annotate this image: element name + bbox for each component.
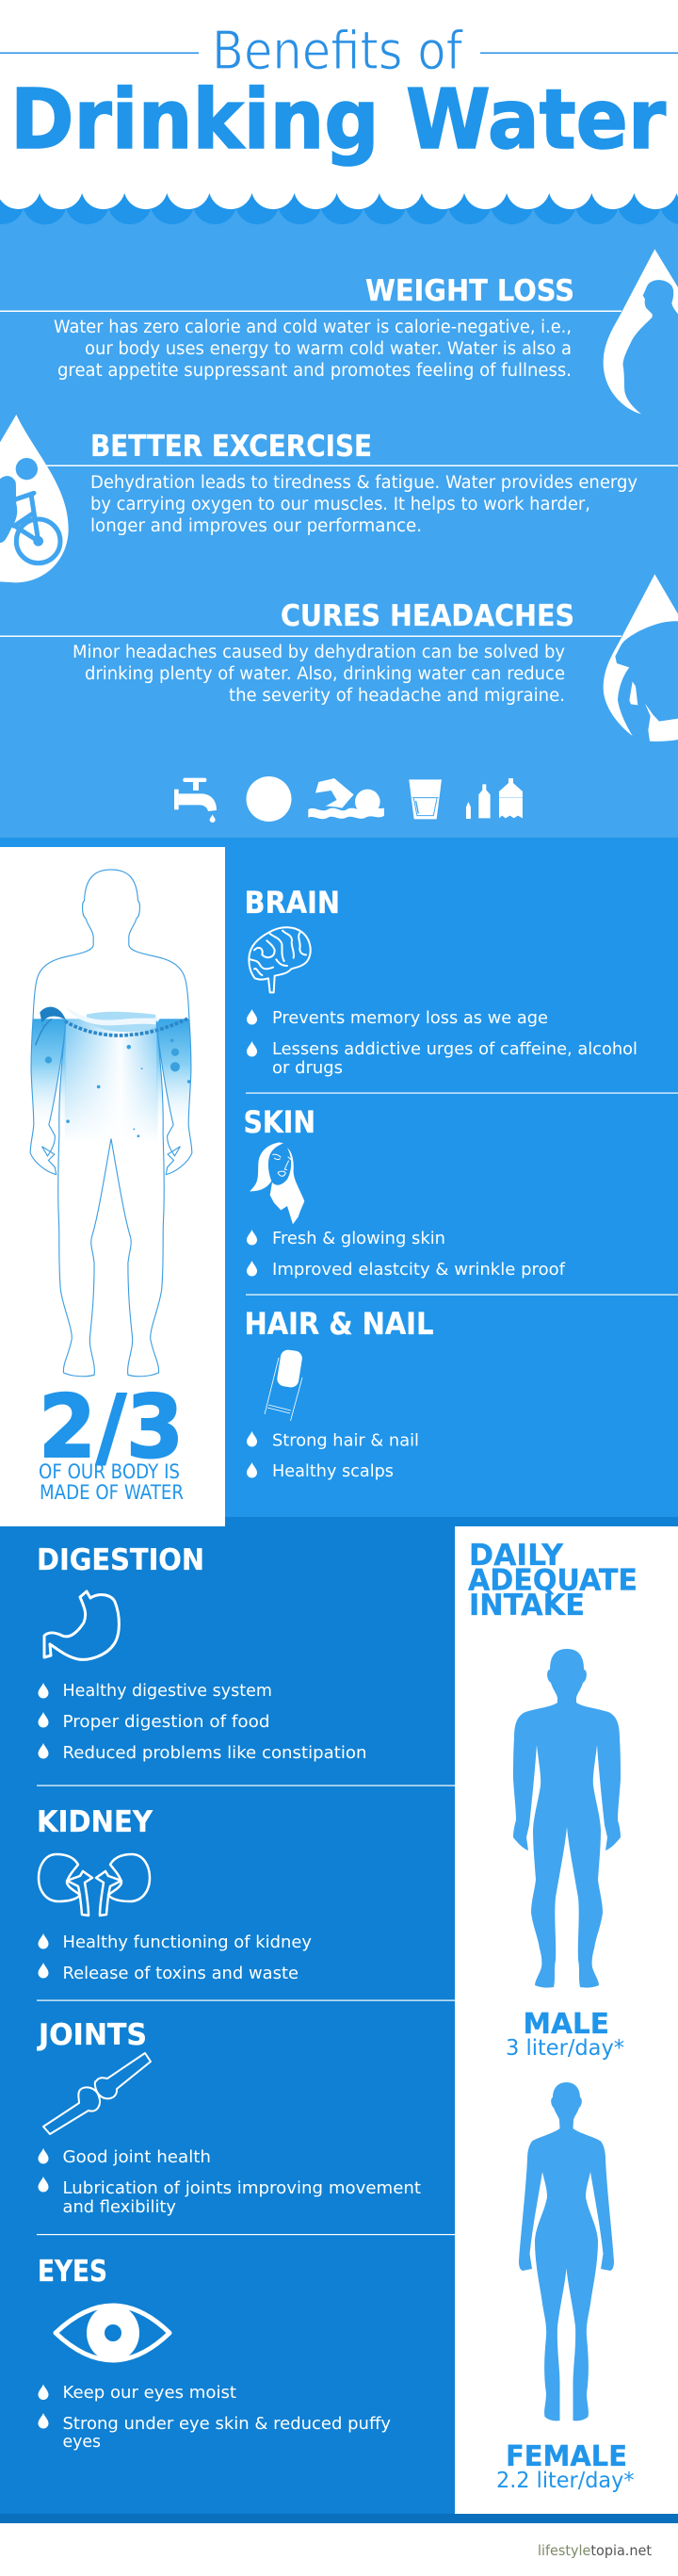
text: longer and improves our performance. [90,516,422,536]
bullets [247,1430,419,1481]
section: hair and nail [245,1306,433,1481]
panel: organs right (blue strip) [0,838,678,1517]
heading: WEIGHT LOSS [365,274,574,308]
bullets: Strong hair & nail [272,1430,419,1451]
heading [468,1539,638,1622]
wave band [0,179,678,224]
heading: ADEQUATE [468,1564,638,1598]
bullets [38,1932,312,1983]
text: Minor headaches caused by dehydration can be solved by [73,643,565,662]
section: digestion [37,1543,455,1786]
bullets: and flexibility [62,2197,176,2217]
panel: body water white [0,847,225,1526]
icon: brain [249,927,311,992]
title [0,21,678,168]
section: joints [37,2018,455,2235]
icon: tap [174,778,217,823]
icon: joint [43,2053,151,2134]
heading: JOINTS [37,2018,147,2052]
section: eyes [38,2255,391,2452]
cures headaches block [0,574,678,742]
female label: FEMALE [506,2440,627,2473]
bullets [247,1229,566,1280]
text: great appetite suppressant and promotes feeling of fullness. [57,361,572,381]
text: our body uses energy to warm cold water. Water is also a [85,339,572,359]
heading: INTAKE [469,1589,585,1622]
icon: glass [409,779,442,819]
text: Dehydration leads to tiredness & fatigue. Water provides energy [90,473,638,493]
bullets: Fresh & glowing skin [272,1229,445,1248]
male label: MALE [524,2008,609,2041]
heading: EYES [38,2255,107,2289]
heading: BETTER EXCERCISE [90,430,372,464]
section: skin [243,1104,678,1296]
heading: KIDNEY [37,1805,153,1839]
icon: drop with head in hands [604,574,678,742]
better excercise block [0,415,678,582]
bullets [38,2383,391,2452]
text: drinking plenty of water. Also, drinking water can reduce [85,664,565,684]
icon: finger nail [265,1348,303,1421]
panel: benefits top [0,179,678,838]
bullets: Proper digestion of food [62,1712,269,1732]
icon: drop with cyclist [0,415,69,582]
panel: organs lower [0,1517,678,2523]
heading: BRAIN [245,885,340,921]
bullets: Lubrication of joints improving movement [62,2178,421,2198]
statistic caption [39,1460,184,1504]
bullets: or drugs [272,1058,343,1078]
bullets [38,1681,367,1763]
statistic 2/3: 2/3 [39,1377,184,1477]
bullets: Prevents memory loss as we age [272,1008,548,1028]
icon: kidneys [39,1854,150,1916]
bullets: Keep our eyes moist [62,2383,236,2403]
icon: bottles [466,778,523,819]
weight loss block [0,249,678,414]
heading: DIGESTION [37,1543,204,1577]
panel: daily intake [455,1526,678,2514]
icon: woman's face [250,1142,304,1224]
icon row [174,776,523,823]
male figure [513,1649,621,1988]
male amount: 3 liter/day* [506,2036,624,2061]
text: Water has zero calorie and cold water is calorie-negative, i.e., [54,318,572,337]
heading: CURES HEADACHES [281,599,574,633]
heading: HAIR & NAIL [245,1306,433,1342]
section: brain [245,885,678,1094]
heading: SKIN [243,1104,315,1140]
title line: Benefits of: Benefits of [212,21,463,82]
text: the severity of headache and migraine. [229,686,565,706]
icon: circle [247,776,292,822]
heading: DAILY [469,1539,564,1573]
icon: stomach [44,1591,119,1659]
bullets: Reduced problems like constipation [62,1743,367,1763]
section: kidney [37,1805,455,2001]
text [73,643,565,706]
female amount: 2.2 liter/day* [496,2469,635,2493]
icon: swimmer [308,778,384,819]
bullets [247,1008,638,1078]
bullets: Strong under eye skin & reduced puffy [62,2414,391,2434]
text [90,473,638,536]
text: by carrying oxygen to our muscles. It helps to work harder, [90,495,590,514]
icon: eye [56,2305,170,2361]
bullets: Healthy digestive system [62,1681,272,1701]
statistic caption: OF OUR BODY IS [39,1460,180,1483]
bullets: eyes [62,2432,101,2452]
bullets: Good joint health [62,2147,211,2167]
female figure [519,2082,614,2421]
bullets: Lessens addictive urges of caffeine, alcohol [272,1039,638,1059]
bullets: Improved elastcity & wrinkle proof [272,1260,566,1280]
text [54,318,572,381]
bullets: Release of toxins and waste [62,1964,299,1983]
body water figure [26,870,199,1377]
footer source: lifestyletopia.net [538,2542,652,2559]
statistic caption: MADE OF WATER [40,1481,184,1504]
bullets: Healthy functioning of kidney [62,1932,312,1952]
icon: drop with overweight person [604,249,678,414]
bullets [38,2147,421,2217]
bullets: Healthy scalps [272,1461,394,1481]
